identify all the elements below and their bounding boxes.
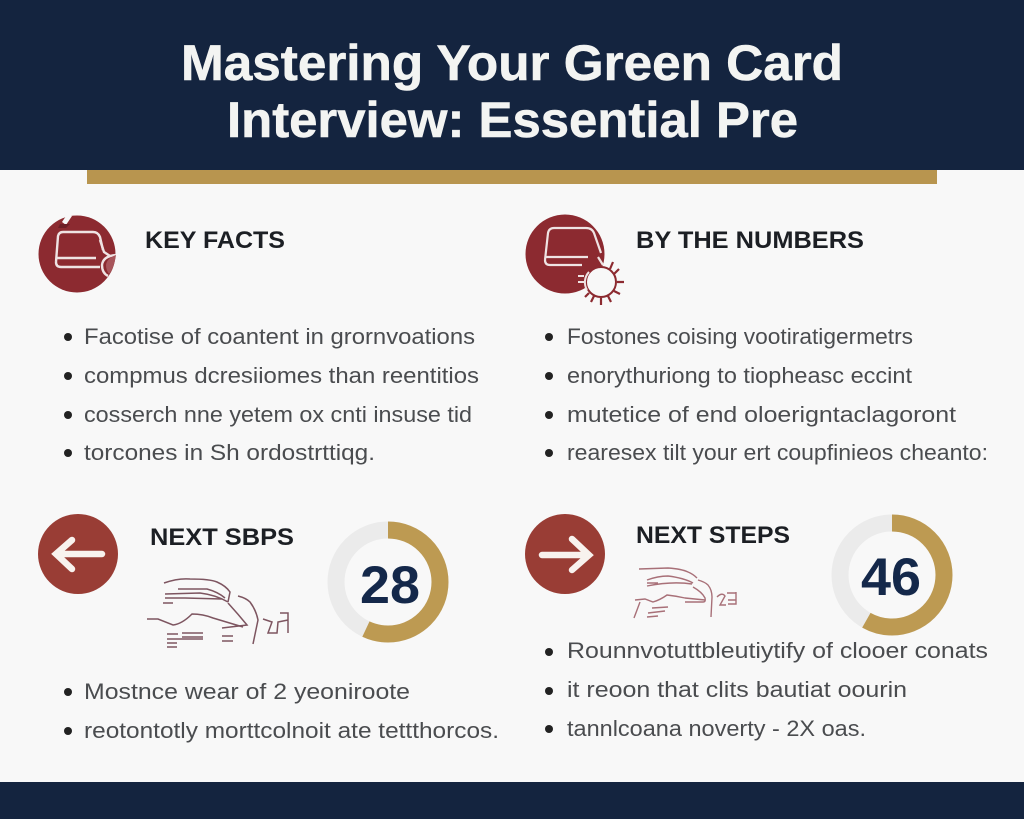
illustration: hand sketch left	[147, 579, 288, 647]
icon: card and gear on red circle	[526, 214, 624, 305]
bullet list: next steps right	[545, 638, 988, 741]
icon: right arrow	[525, 514, 605, 594]
heading: by the numbers: BY THE NUMBERS	[636, 227, 864, 254]
bullet list: next steps right: it reoon that clits bautiat oourin	[567, 677, 907, 702]
donut chart: 46	[840, 523, 944, 627]
bullet list: key facts: compmus dcresiiomes than reentitios	[84, 363, 479, 388]
gold accent bar	[87, 170, 937, 184]
footer band	[0, 782, 1024, 819]
donut chart: 46: 46	[861, 548, 921, 607]
bullet list: by the numbers: mutetice of end oloerigntaclagoront	[567, 402, 956, 427]
bullet list: next steps right: Rounnvotuttbleutiytify of clooer conats	[567, 638, 988, 663]
illustration: hand sketch right	[634, 568, 736, 618]
panel: next steps left	[38, 514, 499, 743]
icon: left arrow	[38, 514, 118, 594]
bullet list: by the numbers: rearesex tilt your ert coupfinieos cheanto:	[567, 440, 988, 465]
panel: next steps right	[525, 514, 988, 741]
bullet list: next steps right: tannlcoana noverty - 2X oas.	[567, 716, 866, 741]
bullet list: key facts: cosserch nne yetem ox cnti insuse tid	[84, 402, 472, 427]
bullet list: key facts: Facotise of coantent in grornvoations	[84, 324, 475, 349]
panel: by the numbers	[526, 214, 988, 465]
donut chart: 28	[336, 530, 440, 634]
panel: key facts	[38, 216, 479, 465]
header band with title: Mastering Your Green Card	[181, 35, 843, 91]
bullet list: key facts: torcones in Sh ordostrttiqg.	[84, 440, 375, 465]
heading: next steps left: NEXT SBPS	[150, 524, 294, 551]
donut chart: 28: 28	[360, 556, 420, 615]
heading: key facts: KEY FACTS	[145, 227, 285, 254]
bullet list: by the numbers	[545, 324, 988, 465]
header band with title: Interview: Essential Pre	[227, 92, 798, 148]
icon: card on red circle	[38, 216, 116, 292]
bullet list: by the numbers: Fostones coising vootiratigermetrs	[567, 324, 913, 349]
bullet list: by the numbers: enorythuriong to tiopheasc eccint	[567, 363, 912, 388]
header band with title	[0, 0, 1024, 170]
bullet list: key facts	[64, 324, 479, 465]
bullet list: next steps left	[64, 679, 499, 743]
bullet list: next steps left: reotontotly morttcolnoit ate tettthorcos.	[84, 718, 499, 743]
heading: next steps right: NEXT STEPS	[636, 522, 790, 549]
bullet list: next steps left: Mostnce wear of 2 yeoniroote	[84, 679, 410, 704]
